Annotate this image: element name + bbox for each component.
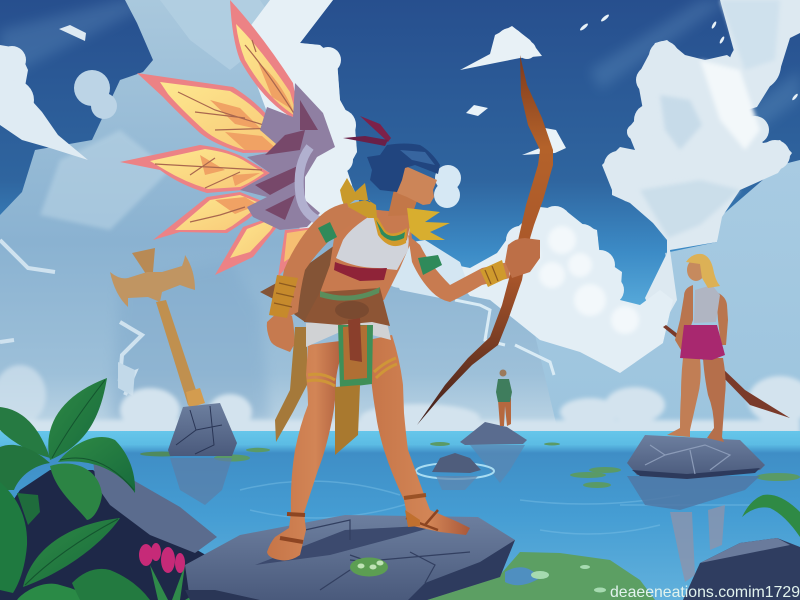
leaf — [0, 482, 27, 593]
left foreground dark rock mass — [0, 470, 240, 600]
face — [396, 165, 437, 205]
wing feather: top — [230, 0, 300, 122]
green shoreline — [420, 552, 655, 600]
white top — [336, 212, 410, 270]
hammer crown — [132, 248, 155, 274]
hanging cape behind — [260, 245, 345, 322]
right figure legs — [667, 358, 701, 437]
right figure skirt — [680, 325, 725, 360]
water ripples — [240, 481, 790, 534]
foliage — [0, 378, 150, 600]
hammer collar — [186, 388, 205, 408]
right figure with spear — [663, 254, 790, 442]
cloud: top-left white — [0, 45, 88, 160]
right hand — [505, 238, 540, 278]
white shorts — [306, 318, 391, 347]
bottom-right rock highlight — [700, 538, 790, 563]
cloud: small near head — [434, 165, 461, 208]
left armband — [318, 222, 337, 243]
lily pads — [140, 442, 800, 488]
left hanging cloth — [275, 327, 307, 442]
distant reflection — [470, 445, 525, 483]
hammer handle — [156, 300, 200, 405]
flower blooms — [139, 543, 198, 583]
main rock slab — [185, 515, 515, 600]
wing hub — [240, 83, 335, 230]
right arm — [408, 235, 510, 302]
leaf — [48, 378, 107, 460]
clouds: white rim behind wing — [240, 0, 357, 230]
right figure hair — [686, 254, 720, 288]
necklace — [373, 215, 407, 246]
archer — [260, 55, 553, 560]
rock slab shadow — [255, 525, 440, 565]
bottom-right leaf — [742, 495, 800, 537]
left shoulder feathers — [340, 178, 377, 218]
wing feather: lower — [153, 192, 267, 240]
bracelet — [480, 260, 507, 287]
distant rock — [460, 422, 527, 445]
hammer statue — [110, 248, 237, 505]
thigh bands — [307, 358, 397, 386]
right figure arms — [675, 285, 693, 350]
pond on shoreline — [505, 567, 540, 585]
left foreground grey rock — [93, 460, 217, 553]
neck — [388, 185, 418, 216]
left hand — [267, 312, 294, 352]
clouds: far left cloud mass — [0, 0, 570, 440]
right figure head — [687, 259, 705, 281]
knot — [335, 301, 369, 319]
bow — [417, 55, 553, 425]
leaf midribs — [25, 380, 134, 585]
left leg — [267, 340, 348, 560]
wing feather: middle — [120, 145, 270, 193]
wing feather: upper — [137, 73, 283, 153]
rock slab cracks — [305, 520, 470, 590]
flower stems — [150, 565, 210, 600]
right armband — [418, 255, 442, 275]
cloud: small top-left — [59, 25, 86, 41]
right sandal — [404, 495, 438, 530]
red belt — [334, 262, 387, 281]
shoreline dots — [531, 565, 606, 592]
cloud: stepped ledge lines — [455, 300, 554, 375]
leaf — [23, 518, 120, 587]
cloud: big right cumulus — [602, 0, 800, 330]
hammer rock — [168, 403, 237, 456]
half-submerged rock with ripple — [416, 453, 494, 490]
hammer head — [110, 255, 195, 307]
apron panel — [338, 318, 373, 388]
small distant figure on rock — [460, 370, 527, 483]
leaf — [0, 445, 50, 490]
apron tail — [335, 385, 360, 455]
distant figure — [496, 370, 512, 426]
cloud: small top center wisps — [466, 14, 799, 155]
leaf — [17, 584, 95, 600]
right figure top — [694, 285, 720, 323]
clouds: right side pale wall — [535, 160, 800, 440]
left wrist bangles — [269, 275, 298, 318]
leaf — [17, 493, 40, 525]
water — [0, 431, 800, 600]
cloud: pale puff — [74, 70, 117, 119]
right figure reflection — [627, 476, 760, 582]
hammer reflection — [170, 458, 232, 505]
moss patch on rock — [350, 558, 388, 576]
torso skin — [318, 207, 412, 300]
loincloth — [304, 288, 390, 326]
right shoulder feathers — [407, 208, 450, 240]
leaf — [50, 464, 102, 520]
leaf — [0, 407, 50, 458]
clouds: stepped block — [118, 362, 135, 396]
cloud: mid right cumulus — [380, 206, 673, 375]
spear — [663, 325, 790, 418]
cloud: top center puff — [460, 26, 542, 70]
leaf — [58, 437, 135, 493]
left arm — [278, 203, 351, 316]
left sandal — [280, 514, 305, 542]
pink flowers — [139, 543, 210, 600]
archer wings — [120, 0, 335, 277]
right leg — [368, 335, 470, 535]
wing feather: lower small — [215, 213, 283, 275]
wing feather: innermost — [278, 227, 317, 277]
sky light rays — [0, 0, 800, 145]
bottom-right rock — [683, 538, 800, 600]
rock slab side — [408, 540, 515, 600]
clouds: left stepped ledges — [0, 240, 142, 395]
hair — [367, 144, 440, 192]
leaf — [72, 569, 150, 600]
clouds: low horizon bank — [0, 365, 800, 434]
right rock — [627, 435, 765, 479]
hair feathers — [343, 116, 391, 146]
